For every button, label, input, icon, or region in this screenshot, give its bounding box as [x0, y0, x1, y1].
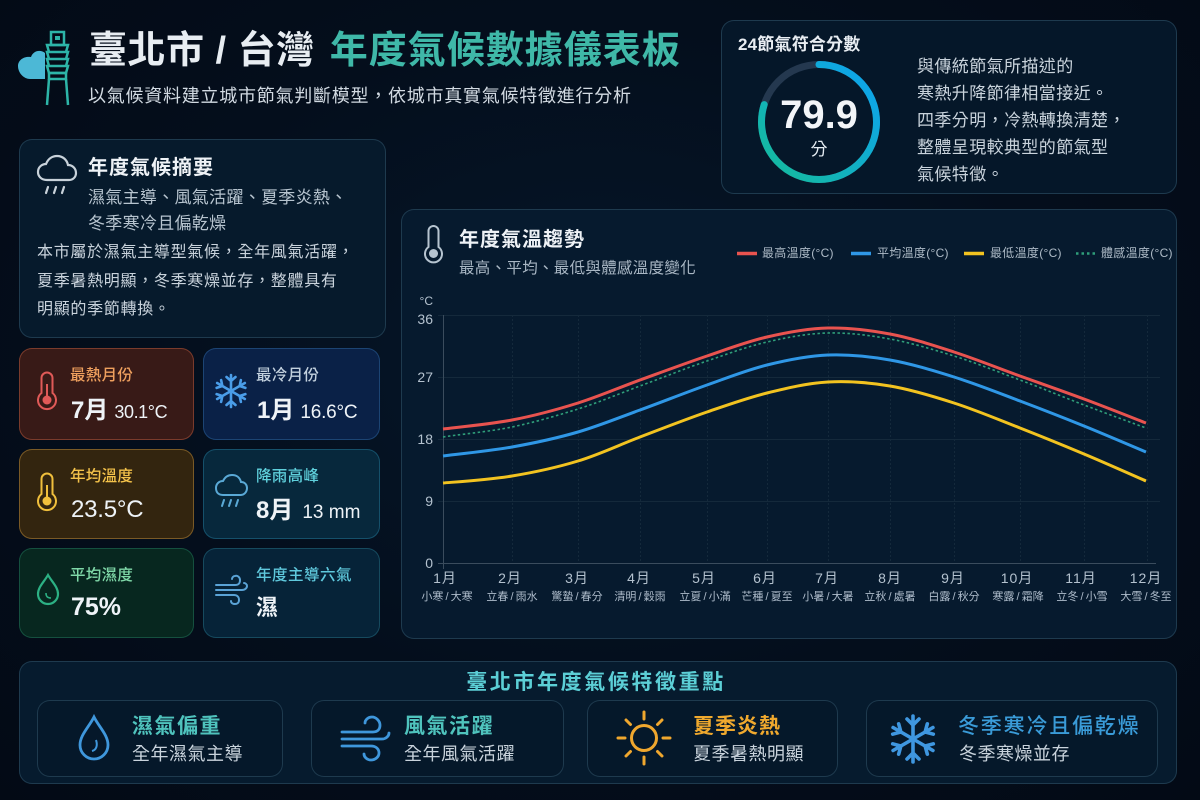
score description	[917, 57, 1126, 184]
features heading: 臺北市年度氣候特徵重點	[466, 671, 726, 694]
score description: 四季分明，冷熱轉換清楚，	[917, 111, 1126, 130]
value: 7月 30.1°C	[71, 397, 167, 424]
icon: snowflake	[890, 714, 936, 764]
x axis month labels: 芒種 / 夏至	[741, 591, 793, 603]
icon: sun	[616, 710, 672, 766]
label: 平均濕度	[70, 567, 133, 584]
card: coldest month	[203, 348, 380, 440]
y axis labels: 36	[417, 311, 433, 327]
x axis month labels: 7月	[815, 570, 839, 586]
value: 濕	[256, 595, 278, 620]
series: minimum temperature	[443, 382, 1146, 483]
feature: humid	[37, 700, 283, 777]
feature: cold dry winter	[866, 700, 1158, 777]
score description: 氣候特徵。	[917, 165, 1004, 184]
x axis month labels: 2月	[498, 570, 522, 586]
icon: droplet	[78, 714, 110, 760]
text: 濕氣偏重	[132, 715, 222, 738]
card: dominant climate qi	[203, 548, 380, 638]
x axis month labels: 驚蟄 / 春分	[551, 591, 603, 603]
x axis month labels: 6月	[753, 570, 777, 586]
x axis month labels: 立冬 / 小雪	[1056, 591, 1108, 603]
card: annual mean temperature	[19, 449, 194, 539]
feature: hot summer: 夏季暑熱明顯	[693, 744, 804, 764]
y axis labels: 27	[417, 369, 433, 385]
value: 23.5°C	[71, 496, 143, 523]
icon: droplet green	[36, 572, 60, 606]
feature: cold dry winter: 冬季寒燥並存	[959, 744, 1070, 764]
chart legend: 最高溫度(°C)	[762, 246, 834, 260]
card: mean humidity	[19, 548, 194, 638]
card: hottest month	[19, 348, 194, 440]
x axis month labels: 8月	[878, 570, 902, 586]
summary heading: 年度氣候摘要	[88, 157, 214, 179]
chart legend: 平均溫度(°C)	[877, 246, 949, 260]
summary tagline: 冬季寒冷且偏乾燥	[88, 214, 226, 233]
chart legend	[737, 246, 1173, 260]
feature: windy: 全年風氣活躍	[404, 744, 515, 764]
value: 1月 16.6°C	[257, 397, 357, 424]
label: 年度主導六氣	[256, 567, 352, 584]
x axis month labels: 小寒 / 大寒	[421, 591, 473, 603]
x axis month labels: 立春 / 雨水	[486, 591, 538, 603]
chart legend: 最低溫度(°C)	[990, 246, 1062, 260]
score description: 寒熱升降節律相當接近。	[917, 84, 1108, 103]
y axis labels: 18	[417, 431, 433, 447]
card: rainfall peak	[203, 449, 380, 539]
x axis month labels: 小暑 / 大暑	[802, 591, 854, 603]
x axis month labels: 1月	[433, 570, 457, 586]
y axis labels: °C	[420, 294, 433, 308]
subtitle: 以氣候資料建立城市節氣判斷模型，依城市真實氣候特徵進行分析	[88, 86, 632, 106]
score unit: 分	[810, 140, 828, 159]
icon: wind	[215, 574, 248, 605]
icon: thermometer	[424, 225, 443, 264]
score description: 與傳統節氣所描述的	[917, 57, 1074, 76]
value: 8月 13 mm	[256, 497, 360, 524]
summary tagline: 濕氣主導、風氣活躍、夏季炎熱、	[88, 188, 348, 207]
feature: windy	[311, 700, 564, 777]
y axis labels: 0	[425, 555, 433, 571]
label: 降雨高峰	[256, 468, 319, 485]
chart legend: 體感溫度(°C)	[1101, 246, 1173, 260]
icon: wind	[340, 716, 390, 762]
text: 冬季寒冷且偏乾燥	[958, 715, 1140, 738]
x axis month labels: 4月	[627, 570, 651, 586]
series: mean temperature	[443, 355, 1146, 456]
label: 最熱月份	[70, 367, 133, 384]
feature: humid: 全年濕氣主導	[132, 744, 243, 764]
x axis month labels: 白露 / 秋分	[928, 591, 980, 603]
panel: annual climate summary	[19, 139, 386, 338]
chart subtitle: 最高、平均、最低與體感溫度變化	[459, 260, 696, 277]
x axis month labels: 3月	[565, 570, 589, 586]
score description: 整體呈現較典型的節氣型	[917, 138, 1108, 157]
icon: snowflake	[215, 374, 247, 408]
panel: key climate features	[19, 661, 1177, 784]
summary body: 夏季暑熱明顯，冬季寒燥並存，整體具有	[37, 272, 338, 290]
series: maximum temperature	[443, 328, 1146, 429]
label: 最冷月份	[256, 367, 319, 384]
summary body	[37, 243, 354, 318]
x axis month labels: 9月	[941, 570, 965, 586]
score value: 79.9	[780, 93, 858, 137]
text: 風氣活躍	[404, 715, 494, 738]
x axis month labels: 12月	[1130, 570, 1162, 586]
x axis month labels: 10月	[1001, 570, 1033, 586]
label: 年均溫度	[70, 468, 133, 485]
panel: temperature trend chart frame	[401, 209, 1177, 639]
x axis month labels: 大雪 / 冬至	[1120, 591, 1172, 603]
score heading: 24節氣符合分數	[738, 35, 861, 54]
summary body: 明顯的季節轉換。	[37, 301, 171, 318]
text: 夏季炎熱	[693, 715, 781, 738]
icon: thermometer red	[37, 372, 57, 410]
feature: hot summer	[587, 700, 838, 777]
summary tagline	[88, 188, 348, 233]
icon: Taipei 101 tower with cloud	[18, 30, 70, 106]
title: 臺北市 / 台灣 年度氣候數據儀表板	[89, 30, 681, 72]
icon: rain cloud	[36, 154, 78, 194]
summary body: 本市屬於濕氣主導型氣候，全年風氣活躍，	[37, 244, 354, 261]
icon: thermometer yellow	[37, 472, 57, 512]
x axis month labels: 立秋 / 處暑	[864, 591, 916, 603]
chart heading: 年度氣溫趨勢	[459, 229, 585, 251]
value: 75%	[71, 593, 121, 621]
x axis month labels: 清明 / 穀雨	[614, 591, 666, 603]
x axis month labels: 寒露 / 霜降	[992, 591, 1044, 603]
y axis labels: 9	[425, 493, 433, 509]
icon: rain cloud blue	[215, 474, 248, 507]
score ring	[758, 61, 880, 183]
x axis month labels: 11月	[1065, 570, 1097, 586]
x axis month labels: 5月	[692, 570, 716, 586]
series: feels-like temperature	[443, 333, 1146, 437]
x axis month labels: 立夏 / 小滿	[679, 591, 731, 603]
panel: solar term score	[721, 20, 1177, 194]
